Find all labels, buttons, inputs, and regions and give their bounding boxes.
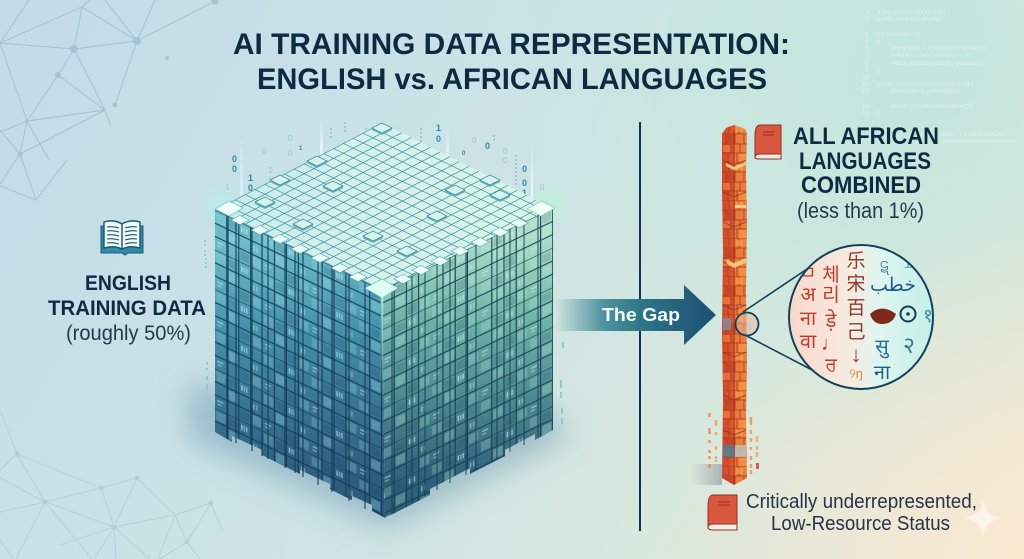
code snippet decoration: top right: int analyze = ()	[877, 31, 920, 38]
code snippet decoration: top right: {	[877, 38, 880, 45]
magnifier lens: language scripts: ဋ	[880, 255, 890, 275]
icon: red book bottom	[708, 495, 737, 530]
binary data streams above cube: 0	[522, 178, 527, 188]
binary data streams above cube: 0	[262, 147, 267, 156]
magnifier lens: language scripts: 1	[904, 255, 913, 272]
code snippet decoration: top right: return.enableneeds(keywords));	[890, 60, 983, 67]
binary data streams above cube: 0	[485, 141, 490, 151]
magnifier connector lines	[743, 265, 818, 373]
code snippet decoration: top right: public external enable	[877, 16, 941, 23]
magnifier lens: language scripts: 百	[846, 298, 866, 319]
magnifier lens: language scripts: ୨ŋ	[849, 366, 863, 381]
icon: open book	[101, 221, 143, 255]
code snippet decoration: top right: }	[877, 67, 880, 74]
code snippet decoration: top right: 5	[865, 38, 869, 45]
title: ENGLISH vs. AFRICAN LANGUAGES	[257, 63, 767, 96]
magnifier lens: language scripts: ♩	[821, 333, 841, 355]
cube top face	[215, 123, 555, 298]
binary data streams above cube: 1	[248, 173, 253, 183]
binary data streams above cube: 1	[299, 146, 303, 152]
label: English training data: (roughly 50%)	[66, 322, 191, 345]
label: English training data: TRAINING DATA	[48, 297, 206, 320]
vertical divider	[639, 122, 641, 531]
code snippet decoration: top right: destraigene.gerate(gs));	[890, 88, 961, 95]
binary data streams above cube: 0	[288, 134, 293, 143]
network decoration: top left	[0, 0, 218, 200]
binary data streams above cube: 1	[522, 188, 527, 198]
magnifier lens: language scripts	[789, 245, 933, 389]
label: English training data	[48, 272, 206, 345]
binary data streams above cube: 1	[268, 166, 273, 175]
shadow beside tower	[690, 464, 722, 485]
magnifier lens: language scripts: ना	[874, 362, 891, 384]
binary data streams above cube	[205, 118, 545, 270]
cube left face	[215, 210, 385, 518]
code snippet decoration: top right: 10	[862, 74, 870, 81]
binary data streams above cube: 0	[232, 154, 237, 164]
magnifier lens: language scripts: خطب	[870, 274, 916, 296]
side data bits	[207, 342, 563, 424]
falling data bits around tower	[710, 413, 758, 474]
code snippet decoration: top right: assignage = metadata.transfer();	[890, 45, 986, 52]
code snippet decoration: top right: // Parameter context ai;	[877, 9, 945, 16]
label: all African languages combined: LANGUAGES	[799, 148, 931, 175]
magnifier lens: language scripts: २	[903, 332, 915, 358]
code snippet decoration: top right: return crstableadscoreine()));	[890, 103, 975, 110]
magnifier lens: language scripts: 리	[822, 284, 840, 306]
magnifier lens: language scripts: ਰ	[824, 355, 838, 376]
binary data streams above cube: 0	[248, 183, 253, 193]
binary data streams above cube: 0	[472, 136, 477, 145]
title: AI TRAINING DATA REPRESENTATION:	[233, 28, 790, 61]
title	[233, 28, 790, 96]
magnifier lens: language scripts: 체	[822, 264, 840, 286]
code snippet decoration: top right: public staticorderoptions(m = 0) {	[877, 81, 974, 88]
label: critically underrepresented	[746, 491, 977, 535]
code snippet decoration: top right: 8	[865, 60, 869, 67]
label: English training data: ENGLISH	[85, 272, 171, 295]
network decoration: bottom left	[0, 410, 222, 559]
cube right face	[382, 208, 553, 518]
code snippet decoration: top right: 6	[865, 45, 869, 52]
code snippet decoration: top right: }	[877, 110, 880, 117]
code snippet decoration: top right: 11	[862, 81, 869, 88]
magnifier lens: language scripts: अ	[800, 284, 816, 306]
code snippet decoration: top right: 12	[862, 88, 870, 95]
code snippet decoration: top right: 2	[865, 16, 869, 23]
label: all African languages combined: (less than 1%)	[797, 198, 924, 223]
magnifier lens: language scripts: 宋	[846, 273, 866, 295]
magnifier lens: language scripts: ↓	[850, 342, 862, 367]
code snippet decoration: top right: 9	[865, 67, 869, 74]
magnifier lens: language scripts: सु	[875, 336, 890, 359]
code snippet decoration: top right	[862, 9, 1017, 145]
magnifier lens: language scripts: ㅁ	[800, 263, 816, 283]
binary data streams above cube: 0	[522, 164, 527, 174]
magnifier lens: language scripts: १	[923, 306, 933, 327]
arrow: the gap	[555, 285, 716, 345]
small magnifier circle	[736, 312, 758, 336]
code snippet decoration: top right: enablefeed datasetPoints	[942, 138, 1017, 145]
code snippet decoration: top right: 7	[865, 52, 869, 59]
label: critically underrepresented: Low-Resource Status	[771, 513, 950, 535]
code snippet decoration: top right: 14	[862, 103, 870, 110]
magnifier lens: language scripts: ना	[800, 308, 817, 330]
magnifier lens: language scripts: ड़े	[825, 309, 837, 332]
label: critically underrepresented: Critically underrepresented,	[746, 491, 977, 513]
binary data streams above cube: 1	[436, 123, 441, 133]
binary data streams above cube: 1	[225, 183, 230, 192]
binary data streams above cube: 0	[288, 149, 293, 158]
code snippet decoration: top right: 1	[865, 9, 869, 16]
icon: red book top	[755, 125, 781, 159]
label: all African languages combined	[793, 123, 939, 223]
binary data streams above cube: 1	[268, 176, 273, 185]
glowing cube corner	[381, 297, 383, 400]
red data tower	[722, 125, 747, 485]
label: all African languages combined: ALL AFRICAN	[793, 123, 939, 150]
binary data streams above cube: 0	[503, 156, 508, 165]
magnifier lens: language scripts: 乐	[846, 250, 866, 272]
code snippet decoration: top right: senderst.commoneerst = 0)	[890, 52, 970, 59]
binary data streams above cube: 0	[540, 183, 545, 192]
binary data streams above cube: 0	[462, 151, 466, 157]
data cube	[215, 123, 555, 518]
code snippet decoration: top right: 15	[862, 110, 870, 117]
binary data streams above cube: 0	[436, 134, 441, 144]
code snippet decoration: top right: 4	[865, 31, 869, 38]
cube glow	[196, 177, 576, 233]
code snippet decoration: top right: elect "/ 0.sestrlikeData	[942, 131, 1008, 138]
binary data streams above cube: 0	[232, 164, 237, 174]
magnifier lens: language scripts: 己	[846, 322, 866, 343]
label: all African languages combined: COMBINED	[801, 172, 921, 199]
arrow: the gap: The Gap	[602, 305, 680, 325]
binary data streams above cube: 0	[503, 147, 508, 156]
icon: sparkle	[965, 501, 1001, 536]
magnifier lens: language scripts: वा	[800, 331, 817, 353]
cube shadow	[185, 385, 565, 530]
